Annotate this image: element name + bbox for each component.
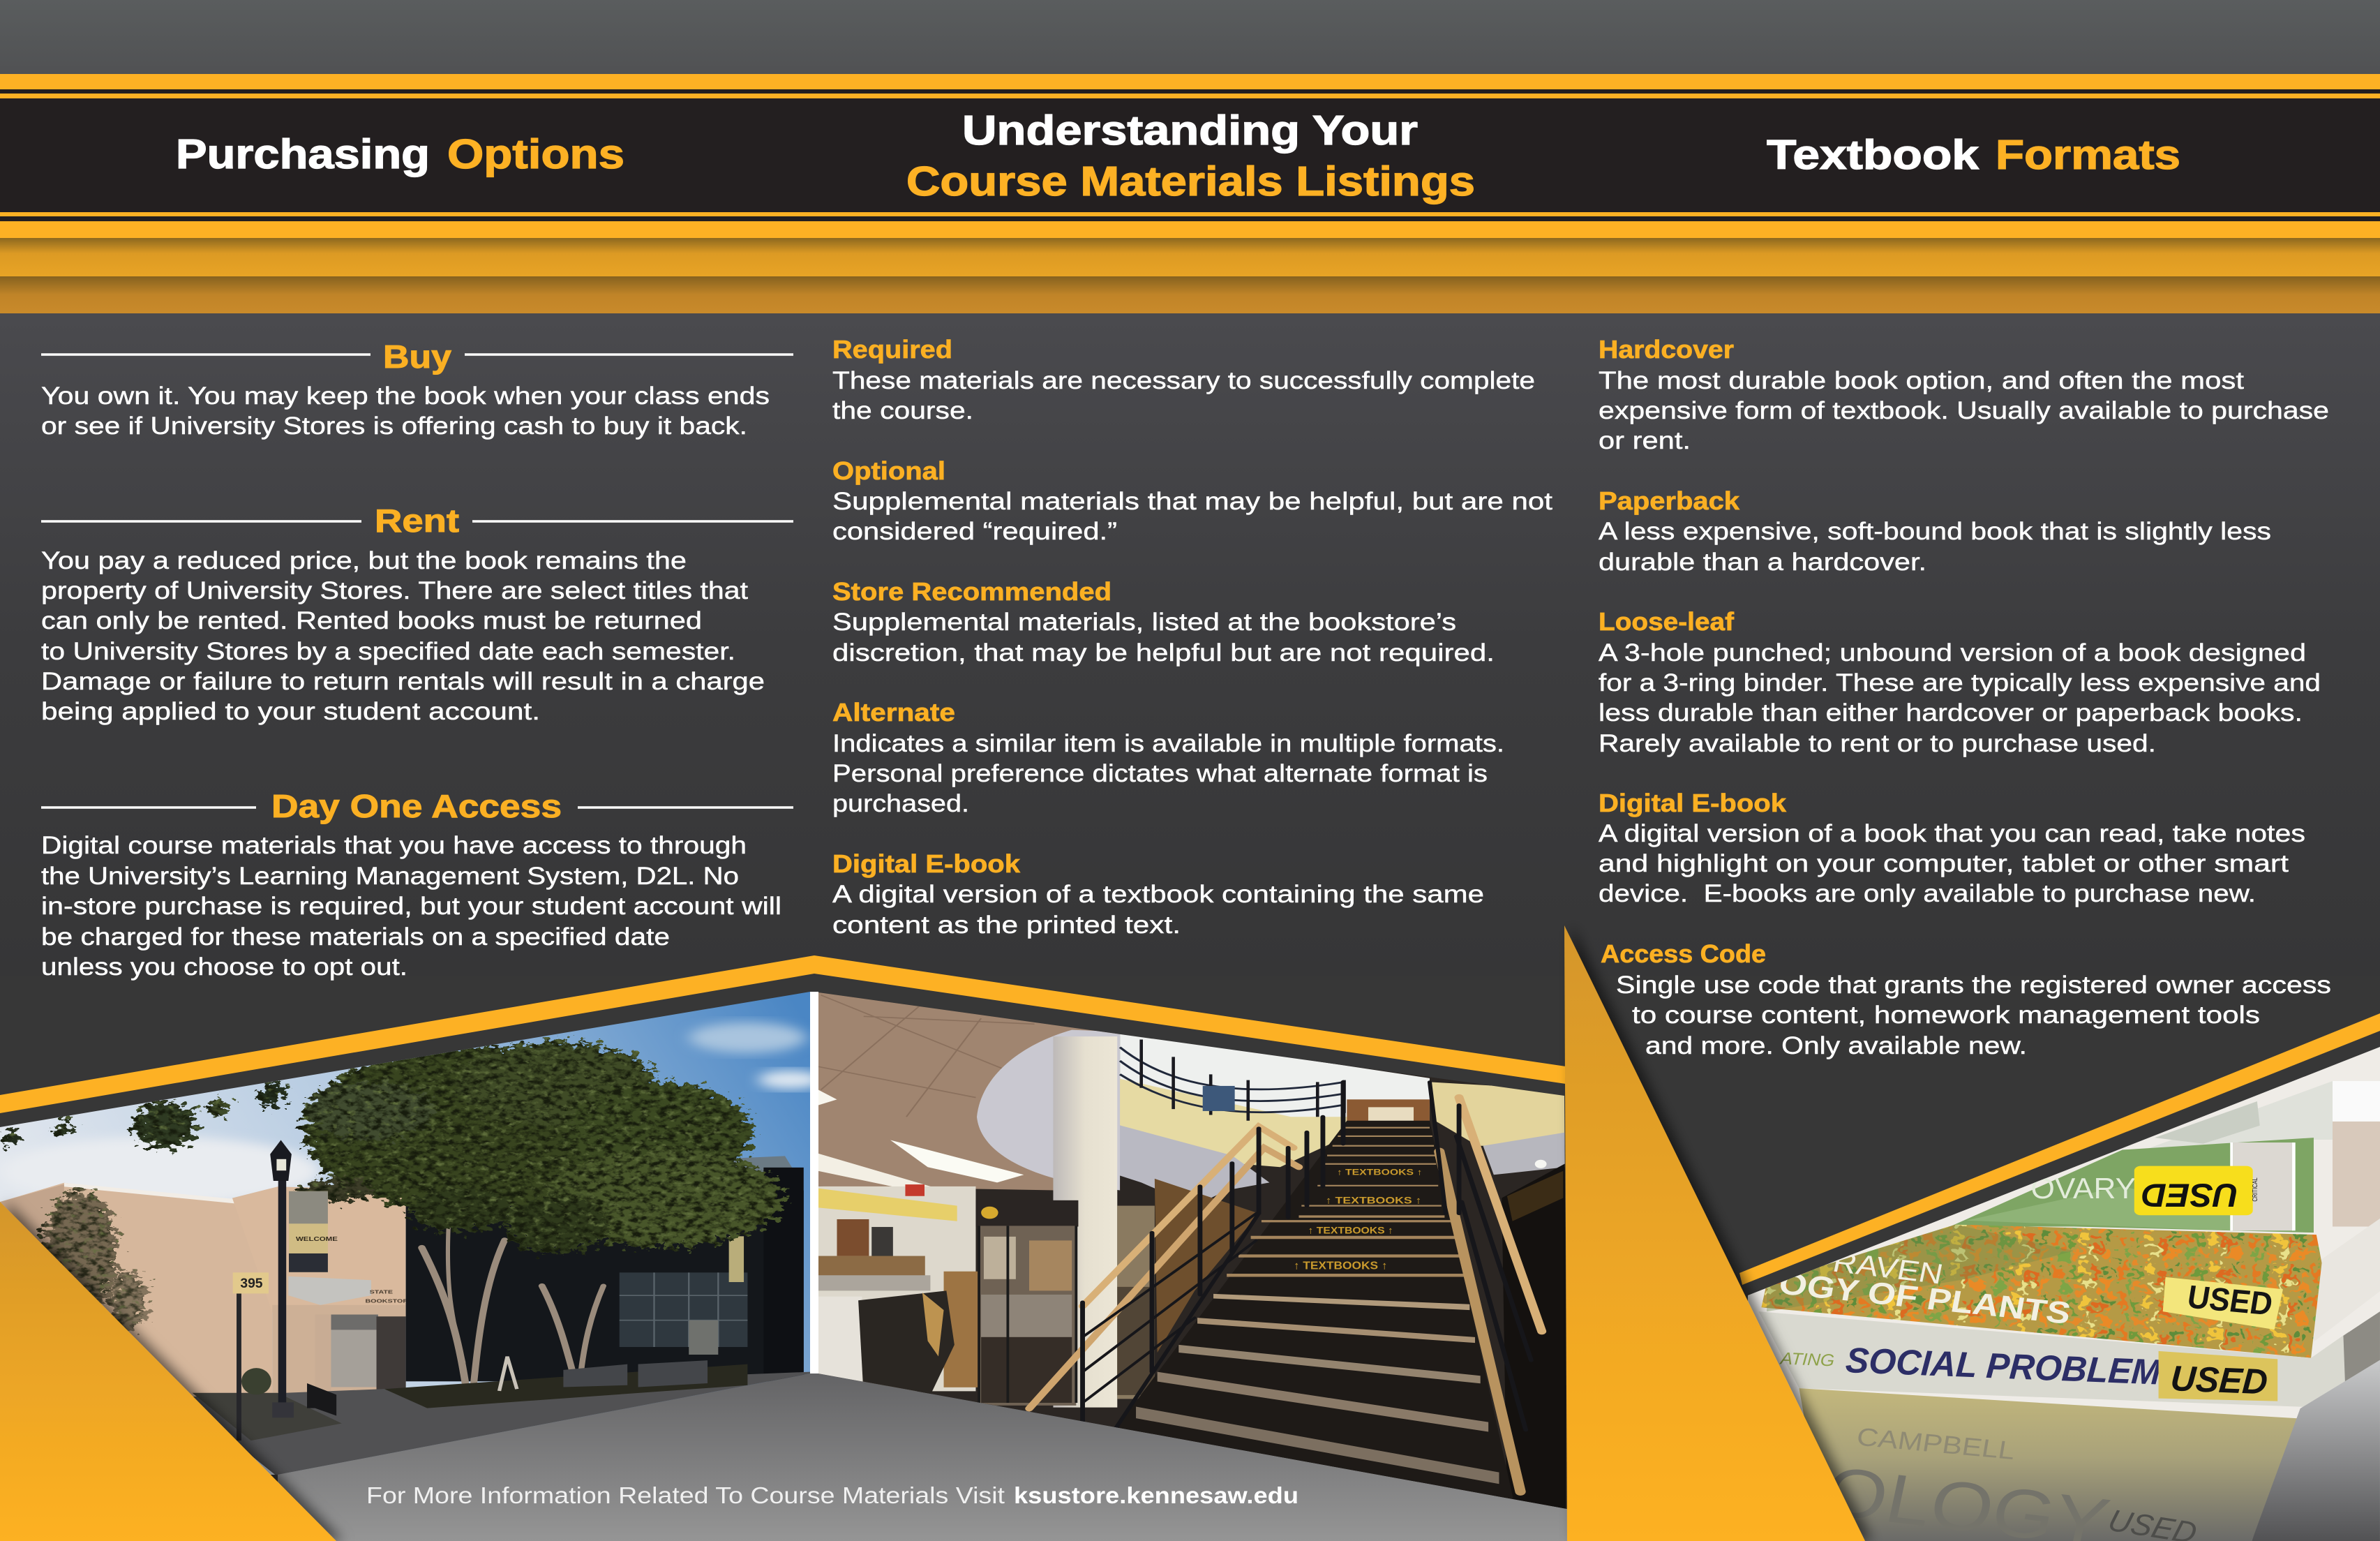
format: Hardcover: expensive form of textbook. Usually available to purchase (1599, 397, 2329, 424)
listing: Alternate: Alternate (832, 698, 955, 727)
format: Paperback: durable than a hardcover. (1599, 549, 1926, 576)
photo: bookstore interior stairs: ↑ TEXTBOOKS ↑ (1326, 1195, 1421, 1206)
orange corner triangle, bottom left (0, 1202, 336, 1541)
footer note: For More Information Related To Course Materials Visit (366, 1482, 1005, 1508)
format: Hardcover: Hardcover (1599, 335, 1734, 364)
format: Access Code: to course content, homework management tools (1632, 1002, 2260, 1029)
photo: stack of used books: CRITICAL (2251, 1177, 2259, 1202)
section: Rent: can only be rented. Rented books must be returned (41, 607, 702, 634)
listing: Store Recommended: discretion, that may be helpful but are not required. (832, 639, 1495, 667)
section: Day One Access: Day One Access (271, 788, 562, 824)
section: Day One Access: in-store purchase is required, but your student account will (41, 893, 781, 920)
photo: stack of used books: RAVEN (1830, 1246, 1946, 1290)
white divider between photos (810, 992, 818, 1374)
photo: bookstore interior stairs: ↑ TEXTBOOKS ↑ (1337, 1168, 1422, 1177)
listing: Optional: considered “required.” (832, 518, 1117, 545)
orange chevron stripe (0, 955, 1566, 1113)
photo: stack of used books: ATING (1779, 1349, 1835, 1370)
format: Access Code: Single use code that grants the registered owner access (1616, 972, 2331, 999)
listing: Digital E-book: content as the printed text. (832, 911, 1181, 939)
listing: Required: the course. (832, 397, 973, 424)
listing: Store Recommended: Store Recommended (832, 577, 1112, 606)
format: Loose-leaf: less durable than either hardcover or paperback books. (1599, 699, 2303, 727)
heading: Understanding Your Course Materials Listings: Course Materials Listings (906, 158, 1475, 204)
format: Access Code (1601, 939, 2331, 1059)
section: Day One Access (41, 788, 793, 981)
listing: Digital E-book: Digital E-book (832, 849, 1021, 878)
photo: bookstore interior stairs: ↑ TEXTBOOKS ↑ (1294, 1259, 1388, 1272)
section: Rent (41, 502, 793, 725)
heading: Purchasing Options: Purchasing (176, 131, 430, 177)
section: Rent: property of University Stores. There are select titles that (41, 577, 748, 604)
header band (0, 74, 2380, 313)
photo: bookstore exterior: WELCOME (296, 1236, 338, 1242)
listing: Optional: Optional (832, 456, 945, 485)
section: Buy (41, 338, 793, 440)
listing: Required: These materials are necessary to successfully complete (832, 367, 1535, 394)
photo: bookstore exterior (0, 992, 810, 1475)
format: Hardcover: The most durable book option, and often the most (1599, 367, 2244, 394)
format: Access Code: Access Code (1601, 939, 1766, 968)
panel: textbook formats (1599, 335, 2331, 1059)
footer note (366, 1482, 1298, 1508)
format: Digital E-book: Digital E-book (1599, 789, 1787, 817)
heading: Understanding Your Course Materials Listings (906, 107, 1475, 204)
format: Digital E-book: device. E-books are only available to purchase new. (1599, 880, 2256, 907)
grey floor band (278, 1374, 1567, 1541)
heading: Textbook Formats: Formats (1996, 132, 2180, 178)
listing: Optional: Supplemental materials that may be helpful, but are not (832, 488, 1552, 515)
section: Day One Access: Digital course materials that you have access to through (41, 832, 747, 859)
format: Loose-leaf: Rarely available to rent or to purchase used. (1599, 730, 2156, 757)
section: Rent: Damage or failure to return rentals will result in a charge (41, 668, 765, 695)
orange diagonal stripe, right (1739, 1013, 2380, 1285)
section: Rent: Rent (375, 502, 459, 539)
format: Digital E-book: and highlight on your computer, tablet or other smart (1599, 850, 2289, 877)
photo: stack of used books: SOCIAL PROBLEM (1844, 1340, 2163, 1392)
listing: Store Recommended: Supplemental materials, listed at the bookstore’s (832, 609, 1456, 636)
section: Rent: to University Stores by a specified date each semester. (41, 638, 735, 665)
format: Hardcover (1599, 335, 2329, 454)
listing: Digital E-book (832, 849, 1484, 939)
photo: bookstore interior stairs: ↑ TEXTBOOKS ↑ (1308, 1225, 1393, 1236)
listing: Alternate: Indicates a similar item is available in multiple formats. (832, 730, 1504, 757)
format: Paperback (1599, 486, 2271, 576)
format: Paperback: Paperback (1599, 486, 1740, 515)
format: Digital E-book: A digital version of a book that you can read, take notes (1599, 820, 2305, 847)
section: Rent: being applied to your student account. (41, 698, 540, 725)
listing: Optional (832, 456, 1552, 545)
section: Day One Access: be charged for these materials on a specified date (41, 923, 670, 951)
section: Buy: or see if University Stores is offering cash to buy it back. (41, 412, 747, 440)
listing: Alternate: purchased. (832, 790, 969, 817)
listing: Store Recommended (832, 577, 1495, 667)
listing: Required (832, 335, 1535, 424)
format: Access Code: and more. Only available new. (1645, 1032, 2027, 1059)
listing: Alternate (832, 698, 1504, 817)
footer note: ksustore.kennesaw.edu (1014, 1482, 1298, 1508)
section: Rent: You pay a reduced price, but the book remains the (41, 547, 687, 574)
photo: stack of used books: USED (2141, 1177, 2238, 1214)
listing: Digital E-book: A digital version of a textbook containing the same (832, 881, 1484, 908)
panel: purchasing options (41, 338, 793, 981)
heading: Textbook Formats (1767, 132, 2180, 178)
listing: Required: Required (832, 335, 952, 364)
photo: bookstore exterior: 395 (240, 1276, 263, 1290)
format: Loose-leaf: for a 3-ring binder. These are typically less expensive and (1599, 669, 2321, 697)
section: Day One Access: the University’s Learning Management System, D2L. No (41, 863, 739, 890)
photo: bookstore interior stairs (816, 990, 1574, 1515)
section: Buy: You own it. You may keep the book when your class ends (41, 382, 770, 410)
photo: stack of used books: USED (2169, 1358, 2269, 1401)
format: Loose-leaf (1599, 607, 2321, 757)
photo: stack of used books: OGY OF PLANTS (1776, 1266, 2074, 1330)
photo: stack of used books: OVARY (2031, 1172, 2136, 1205)
orange triangle, right panel (1564, 925, 1865, 1541)
section: Buy: Buy (383, 338, 451, 375)
format: Loose-leaf: Loose-leaf (1599, 607, 1735, 636)
photo: stack of used books: USED (2185, 1279, 2275, 1323)
format: Digital E-book (1599, 789, 2305, 907)
heading: Understanding Your Course Materials Listings: Understanding Your (962, 107, 1418, 154)
heading: Purchasing Options: Options (447, 131, 624, 177)
photo: bookstore exterior: BOOKSTORE (365, 1298, 413, 1304)
panel: course materials listings (832, 335, 1552, 939)
photo: stack of used books (1747, 1047, 2380, 1541)
format: Paperback: A less expensive, soft-bound book that is slightly less (1599, 518, 2271, 545)
section: Day One Access: unless you choose to opt out. (41, 953, 407, 981)
format: Hardcover: or rent. (1599, 427, 1691, 454)
photo: stack of used books: CAMPBELL (1855, 1422, 2017, 1465)
photo: bookstore exterior: STATE (370, 1289, 393, 1295)
heading: Textbook Formats: Textbook (1767, 132, 1979, 178)
format: Loose-leaf: A 3-hole punched; unbound version of a book designed (1599, 639, 2306, 667)
heading: Purchasing Options (176, 131, 624, 177)
listing: Alternate: Personal preference dictates what alternate format is (832, 760, 1488, 787)
